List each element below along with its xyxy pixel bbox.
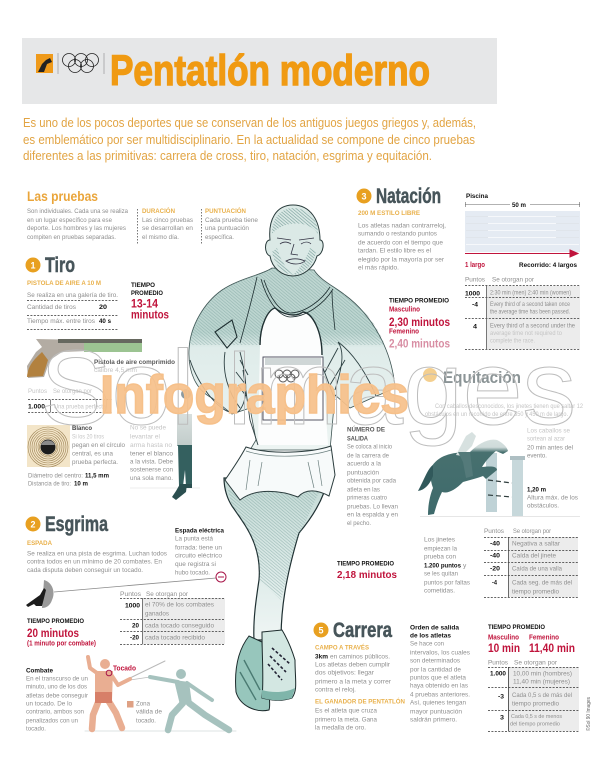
panel: carrera (314, 619, 592, 732)
diagram: pool: Piscina (466, 193, 488, 200)
intro paragraph (23, 116, 476, 163)
heading: esgrima (26, 513, 108, 536)
text: caballos sorteo: evento. (527, 452, 547, 460)
table: natacion points: the average time has been passed. (490, 308, 570, 316)
table: esgrima points: cada tocado conseguido (145, 622, 214, 630)
text: orden de salida: mayor puntuación (410, 708, 462, 716)
icon: epee (26, 572, 226, 608)
table: carrera points: Cada 0,5 s de menos (511, 714, 562, 720)
text: ganador: Es el atleta que cruza (315, 708, 377, 714)
text: natacion description: 200 M ESTILO LIBRE (358, 210, 420, 217)
text: orden de salida: puntos que el atleta (410, 674, 466, 682)
table: natacion points: 2:30 min (men) 2:40 min (women) (490, 290, 571, 296)
text: arm note: levantar el (130, 434, 161, 440)
intro paragraph: Es uno de los pocos deportes que se conservan de los antiguos juegos griegos y, además, (23, 116, 476, 130)
callout: tocado: Tocado (113, 666, 136, 672)
text: tiempo promedio esgrima: (1 minuto por combate) (27, 640, 96, 648)
diagram: pool: 50 m (512, 202, 526, 209)
legend: zona valida (127, 700, 162, 724)
heading: esgrima: Esgrima (45, 513, 108, 536)
text: equitacion intro: Con caballos desconocidos, los jinetes tienen que saltar 12 (435, 403, 583, 410)
text: combate: atletas debe conseguir (26, 692, 89, 700)
text: caballos sorteo: 20 min antes del (527, 444, 574, 452)
text: combate: minuto, uno de los dos (26, 684, 88, 690)
table: carrera points: 3 (500, 714, 504, 722)
text: pistola caption: Pistola de aire comprimido (94, 359, 175, 366)
text: ganador: la medalla de oro. (315, 724, 366, 732)
text: arm note: tener el blanco (130, 450, 173, 458)
text: natacion description: Los atletas nadan contrarreloj, (358, 222, 446, 230)
table: esgrima points (120, 591, 225, 644)
text: orden de salida: son determinados (410, 658, 461, 664)
text: tiempo promedio equitacion: TIEMPO PROMEDIO (337, 560, 394, 568)
text: arm note: sostenerse con (130, 466, 173, 474)
text: tiempo promedio carrera: Femenino (529, 634, 559, 642)
text: espada: ESPADA (27, 540, 52, 547)
text: blanco: prueba perfecta. (72, 459, 118, 466)
text: natacion description: sumando o restando puntos (358, 230, 438, 238)
text: puntuacion (205, 206, 258, 241)
text: combate: tocado. (26, 726, 46, 732)
icon: target (27, 425, 70, 467)
panel: natacion (356, 185, 580, 350)
table: esgrima points: el 70% de los combates (145, 602, 215, 608)
text: combate (26, 668, 89, 732)
table: equitacion points: Caída de una valla (512, 566, 562, 572)
text: pistola rules: Tiempo máx. entre tiros (27, 318, 96, 325)
text: natacion description: el más rápido. (358, 264, 399, 272)
text: orden de salida: 4 pruebas anteriores. (410, 692, 470, 698)
text: target measures: Distancia de tiro: (28, 480, 71, 488)
table: tiro points: 1.000 (28, 404, 45, 410)
text: jinetes: empiezan la (424, 546, 457, 552)
table: carrera points: tiempo promedio (512, 700, 559, 708)
text: combate: un tocado. De lo (26, 700, 72, 708)
text: duracion: Las cinco pruebas (142, 217, 194, 224)
table: esgrima points: cada tocado recibido (145, 634, 205, 642)
heading: equitacion: Equitación (443, 368, 521, 387)
text: caballos sorteo: sortean al azar (527, 436, 566, 442)
table: esgrima points: Se otorgan por (146, 591, 189, 598)
text: blanco: central, es una (72, 450, 113, 458)
text: numero de salida: acuerdo a la (347, 460, 381, 468)
table: natacion points: Every third of a second under the (490, 322, 575, 330)
text: tiempo promedio equitacion: 2,18 minutos (337, 569, 397, 581)
table: natacion points: Every third of a second taken once (490, 301, 570, 308)
text: tiempo promedio carrera (488, 624, 575, 655)
text: campo a traves: primero a la meta y correr (315, 678, 392, 686)
heading: tiro: Tiro (45, 254, 75, 277)
text: pistola rules: Se realiza en una galería de tiro. (27, 292, 118, 299)
text: jinetes (424, 536, 471, 594)
text: las pruebas: en un lugar específico para ese (27, 217, 112, 224)
arrow: lap (465, 250, 578, 257)
text: jinetes: 1.200 puntos (424, 562, 461, 570)
text: campo a traves: contra el reloj. (315, 686, 356, 694)
diagram: pool: 1 largo (465, 262, 485, 269)
table: carrera points: 10,00 min (hombres) (513, 670, 572, 678)
heading: tiro: 1 (30, 260, 36, 270)
table: carrera points: Se otorgan por (514, 660, 558, 666)
table: equitacion points: Caída del jinete (512, 552, 556, 560)
text: blanco (72, 425, 125, 466)
panel: equitacion (337, 368, 583, 598)
heading: tiro (26, 254, 75, 277)
table: equitacion points: Puntos (484, 528, 505, 535)
title: Pentatlón moderno (110, 47, 430, 95)
table: carrera points: del tiempo promedio (510, 722, 560, 728)
icon: pentathlon logo (36, 54, 53, 73)
text: equitacion intro: obstáculos en un recorrido de entre 350 y 450 m de largo. (425, 411, 568, 418)
table: natacion points: Puntos (465, 276, 486, 284)
text: numero de salida: Se coloca al inicio (347, 444, 392, 450)
runner: white chest opening (258, 308, 328, 445)
text: jinetes: Los jinetes (424, 536, 456, 544)
text: altura obstaculos (527, 486, 579, 510)
illustration: shooter (130, 389, 200, 500)
watermark (40, 329, 576, 447)
text: duracion: DURACIÓN (142, 206, 175, 215)
text: arm note: arma hasta no (130, 442, 172, 449)
text: target measures: 11,5 mm (85, 472, 109, 480)
text: combate: penalizados con un (26, 718, 78, 724)
text: tiempo promedio natacion: Masculino (389, 306, 420, 314)
text: target measures (28, 472, 109, 488)
table: natacion points: complete the race. (490, 338, 535, 344)
icon: olympic rings (58, 53, 104, 74)
text: tiempo promedio carrera: Masculino (488, 634, 519, 642)
runner: bib with rings (263, 357, 323, 420)
text: campo a traves: Los atletas deben cumplir (315, 662, 391, 668)
text: pistola rules: 20 (99, 304, 107, 311)
icon: air pistol (27, 339, 142, 378)
text: orden de salida: Así, quienes tengan (410, 700, 466, 706)
text: jinetes: y (463, 562, 467, 570)
text: espada electrica: hubo tocado. (175, 570, 210, 576)
text: arm note (130, 424, 173, 482)
runner figure (189, 205, 395, 711)
text: arm note: No se puede (130, 424, 166, 432)
text: numero de salida: el pecho. (347, 520, 371, 527)
heading: esgrima: 2 (30, 520, 36, 530)
text: espada (27, 540, 168, 574)
text: espada: Se realiza en una pista de esgrima. Luchan todos (27, 550, 168, 558)
intro paragraph: es emblemático por ser multidisciplinario. En la actualidad se compone de cinco pruebas (23, 133, 475, 147)
text: target measures: 10 m (74, 480, 88, 488)
text: numero de salida (347, 424, 398, 527)
text: espada electrica: que registra si (175, 561, 217, 568)
table: carrera points: Cada 0,5 s de más del (512, 692, 572, 699)
text: orden de salida: Orden de salida (410, 624, 459, 632)
text: ganador: primero la meta. Gana (315, 716, 377, 724)
text: pistola caption: calibre 4,5 mm (94, 367, 137, 374)
text: caballos sorteo: Los caballos se (527, 428, 570, 434)
legend: zona valida: tocado. (136, 718, 156, 724)
text: campo a traves: CAMPO A TRAVÉS (315, 642, 369, 652)
text: caballos sorteo (527, 428, 574, 460)
diagram: pool (465, 193, 580, 269)
text: natacion description: elegido por la mayoría por ser (358, 256, 445, 264)
intro paragraph: diferentes a las primitivas: carrera de cross, tiro, natación, esgrima y equitación. (23, 149, 432, 163)
heading: carrera: 5 (318, 626, 324, 636)
table: carrera points: 11,40 min (mujeres) (513, 678, 570, 686)
table: natacion points: 1000 (465, 290, 480, 298)
text: campo a traves (315, 642, 392, 694)
table: equitacion points: -20 (490, 566, 500, 572)
text: pistola rules: PISTOLA DE AIRE A 10 M (27, 280, 101, 287)
text: numero de salida: atleta en las (347, 486, 381, 494)
runner: forearms and hands (190, 342, 376, 445)
text: blanco: pegan en el círculo (72, 442, 125, 449)
runner: legs (224, 478, 328, 640)
table: equitacion points: -40 (490, 540, 500, 548)
text: numero de salida: puntuación (347, 470, 379, 476)
heading: natacion: Natación (376, 185, 441, 208)
text: arm note: a la vista. Debe (130, 458, 173, 466)
table: equitacion points: Cada seg. de más del (512, 580, 572, 586)
text: tiempo promedio tiro: TIEMPO (131, 282, 155, 289)
panel: esgrima (26, 513, 236, 732)
table: tiro points: Puntos (28, 388, 48, 395)
text: las pruebas: compiten en pruebas separadas. (27, 234, 116, 241)
text: tiempo promedio equitacion (337, 560, 397, 581)
heading: carrera (314, 619, 392, 642)
runner: head (266, 205, 323, 276)
text: puntuacion: Cada prueba tiene (205, 217, 258, 224)
text: tiempo promedio esgrima: TIEMPO PROMEDIO (27, 618, 84, 625)
runner: arms and torso (189, 268, 395, 450)
heading: natacion (356, 185, 441, 208)
table: tiro points (28, 388, 113, 412)
credit: ©Sol 90 Images (585, 697, 592, 731)
text: orden de salida: Se hace con (410, 640, 444, 648)
text: altura obstaculos: obstáculos. (527, 502, 559, 510)
text: tiempo promedio tiro: PROMEDIO (131, 290, 163, 297)
panel: las pruebas (27, 188, 258, 245)
text: orden de salida: intervalos, los cuales (410, 650, 471, 656)
text: tiempo promedio natacion: TIEMPO PROMEDIO (389, 298, 449, 304)
text: las pruebas (27, 208, 128, 241)
text: espada electrica: circuito eléctrico (175, 552, 222, 560)
table: equitacion points: Se otorgan por (513, 528, 552, 535)
text: numero de salida: SALIDA (347, 436, 368, 442)
text: jinetes: se les quitan (424, 570, 458, 578)
text: tiempo promedio tiro: minutos (131, 310, 169, 322)
text: altura obstaculos: Altura máx. de los (527, 494, 579, 502)
table: equitacion points: tiempo promedio (512, 588, 559, 596)
table: natacion points: average time not required to (490, 330, 562, 337)
text: espada electrica: La punta está (175, 536, 213, 542)
watermark: infographics: Infographics (100, 365, 409, 425)
table: esgrima points: -20 (130, 634, 139, 642)
text: jinetes: cometidas. (424, 588, 455, 594)
heading: natacion: 3 (361, 192, 367, 202)
text: altura obstaculos: 1,20 m (527, 486, 546, 494)
table: esgrima points: 1000 (125, 602, 140, 610)
teal fencer (150, 669, 229, 730)
table: esgrima points: ganados (145, 610, 170, 618)
text: combate: Combate (26, 668, 53, 674)
text: arm note: una sola mano. (130, 475, 173, 482)
text: pistola caption (94, 359, 175, 374)
table: natacion points (465, 276, 580, 350)
table: carrera points: 1.000 (490, 670, 506, 678)
text: equitacion intro (425, 403, 583, 418)
legend: zona valida: válida de (136, 708, 162, 716)
table: natacion points: -4 (472, 302, 478, 308)
table: esgrima points: Puntos (120, 591, 142, 598)
header band (22, 38, 497, 104)
table: equitacion points: Negativa a saltar (512, 540, 561, 548)
text: orden de salida: de los atletas (410, 632, 451, 640)
text: tiempo promedio carrera: TIEMPO PROMEDIO (488, 624, 545, 631)
text: numero de salida: en la espalda y en (347, 512, 398, 518)
table: equitacion points (484, 528, 578, 598)
text: espada: cada disputa deben conseguir un tocado. (27, 567, 143, 574)
red fencer (88, 657, 130, 729)
heading: las pruebas: Las pruebas (27, 188, 98, 204)
text: tiempo promedio carrera: 11,40 min (529, 643, 575, 655)
runner: face (277, 238, 314, 264)
table: carrera points: Puntos (488, 660, 509, 666)
text: orden de salida: saldrán primero. (410, 716, 457, 724)
text: duracion: se desarrollan en (142, 225, 193, 232)
text: espada electrica: Espada eléctrica (175, 528, 224, 534)
table: tiro points: Se otorgan por (53, 388, 93, 395)
text: numero de salida: pruebas. Lo llevan (347, 504, 398, 510)
text: orden de salida (410, 624, 471, 724)
heading: carrera: Carrera (333, 619, 392, 642)
text: campo a traves: dos objetivos: llegar (315, 670, 375, 676)
text: blanco: Blanco (72, 425, 92, 432)
table: carrera points (488, 660, 579, 732)
illustration: fencers (85, 657, 236, 731)
text: combate: contrario, ambos son (26, 708, 84, 716)
table: natacion points: 4 (473, 324, 477, 330)
text: tiempo promedio natacion: 2,40 minutos (389, 338, 450, 350)
diagram: pool: Recorrido: 4 largos (519, 262, 577, 269)
text: espada electrica (175, 528, 224, 576)
text: target measures: Diámetro del centro: (28, 472, 83, 480)
table: equitacion points: -4 (492, 580, 497, 586)
text: tiempo promedio tiro: 13-14 (131, 298, 159, 310)
text: natacion description (358, 210, 446, 272)
table: esgrima points: 20 (132, 622, 139, 630)
text: duracion: el mismo día. (142, 234, 179, 241)
table: equitacion points: -40 (490, 552, 500, 560)
text: orden de salida: haya obtenido en las (410, 682, 469, 690)
text: las pruebas: deporte. Los hombres y las mujeres (27, 225, 127, 232)
text: tiempo promedio carrera: 10 min (488, 643, 520, 655)
text: las pruebas: Son individuales. Cada una se realiza (27, 208, 128, 215)
text: numero de salida: de la carrera de (347, 452, 389, 460)
table: carrera points: -3 (498, 694, 504, 700)
text: combate: En el transcurso de un (26, 676, 88, 682)
text: pistola rules: 40 s (99, 318, 111, 325)
text: duracion (142, 206, 194, 241)
text: espada electrica: forrada: tiene un (175, 544, 222, 552)
runner: shoulder hatching (189, 268, 385, 345)
text: espada: contra todos en un mínimo de 20 combates. En (27, 558, 162, 566)
text: puntuacion: específica. (205, 234, 234, 241)
text: numero de salida: primeras cuatro (347, 494, 387, 502)
text: ganador (315, 696, 405, 732)
panel: tiro (26, 254, 200, 500)
text: tiempo promedio natacion: 2,30 minutos (389, 317, 450, 329)
text: blanco: Si los 20 tiros (72, 434, 105, 440)
text: tiempo promedio esgrima (27, 618, 96, 648)
watermark: outlined logo text: Sol Images (40, 329, 576, 447)
text: campo a traves: 3km (315, 654, 328, 660)
illustration: horse jumping (418, 432, 580, 516)
text: tiempo promedio esgrima: 20 minutos (27, 628, 79, 640)
text: pistola rules (27, 280, 118, 330)
text: jinetes: puntos por faltas (424, 580, 471, 586)
text: tiempo promedio natacion: Femenino (389, 328, 419, 336)
text: pistola rules: Cantidad de tiros (27, 304, 77, 311)
table: natacion points: Se otorgan por (492, 276, 535, 284)
text: orden de salida: por la cantidad de (410, 666, 461, 674)
legend: zona valida: Zona (136, 700, 150, 708)
text: campo a traves: en caminos públicos. (330, 654, 390, 660)
text: tiempo promedio natacion (389, 298, 450, 350)
text: jinetes: prueba con (424, 554, 456, 560)
text: numero de salida: obtenida por cada (347, 478, 396, 484)
text: puntuacion: PUNTUACIÓN (205, 206, 246, 215)
text: natacion description: tardan. El estilo libre es el (358, 248, 432, 254)
text: numero de salida: NÚMERO DE (347, 424, 386, 434)
text: ganador: EL GANADOR DE PENTATLÓN (315, 696, 405, 706)
text: puntuacion: una puntuación (205, 225, 249, 232)
runner: arm gap (215, 320, 237, 348)
runner: shorts (225, 446, 335, 500)
text: tiempo promedio tiro (131, 282, 169, 322)
text: natacion description: de acuerdo con el tiempo que (358, 240, 443, 246)
callout: tocado (106, 666, 136, 676)
runner: shoes (236, 636, 270, 711)
table: tiro points: Una prueba perfecta (54, 404, 106, 410)
